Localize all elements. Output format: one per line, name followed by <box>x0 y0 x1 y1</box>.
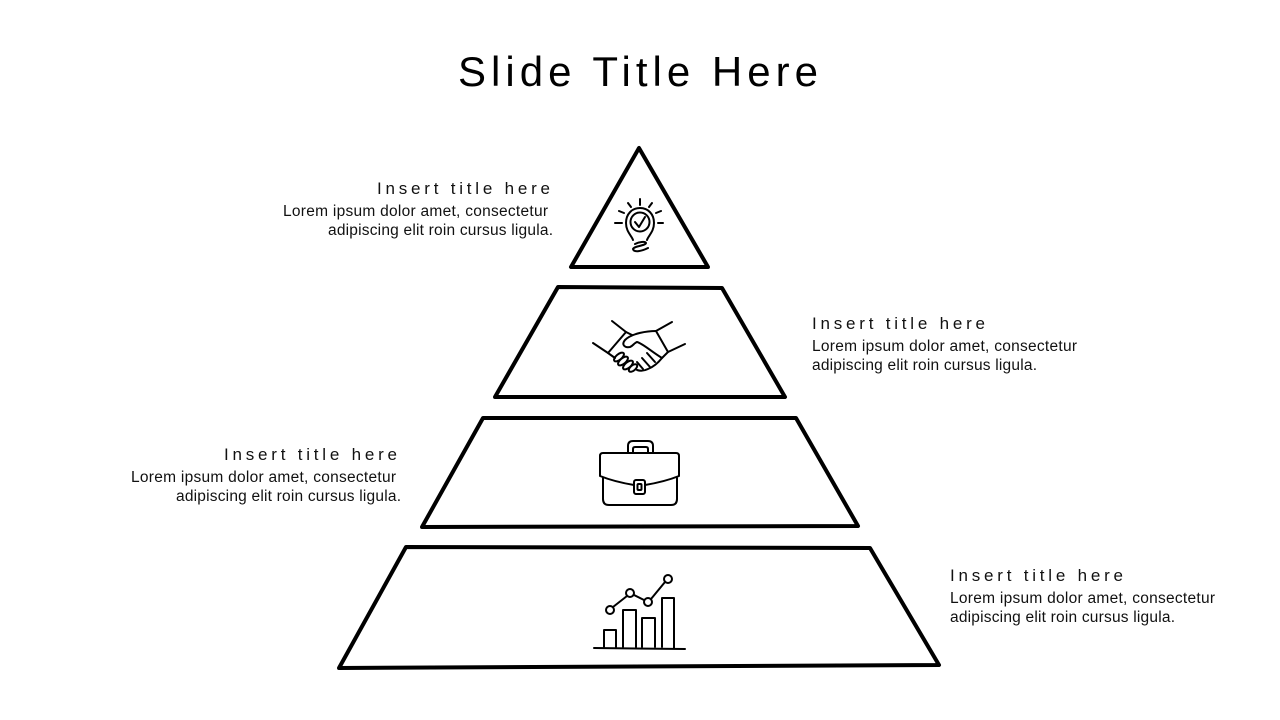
icon: bar chart with trend line <box>594 575 685 649</box>
text block: second right <box>812 314 1077 374</box>
panel: pyramid top tier <box>571 148 708 267</box>
text block: third left: Insert title here <box>224 445 397 464</box>
panel: pyramid bottom tier <box>339 547 939 668</box>
text block: top left <box>283 179 553 239</box>
icon: briefcase <box>600 441 679 505</box>
text block: bottom right <box>950 566 1215 626</box>
text block: second right: Lorem ipsum dolor amet, consectetur <box>812 338 1077 355</box>
text block: bottom right: adipiscing elit roin cursus ligula. <box>950 609 1175 626</box>
text block: second right: adipiscing elit roin cursus ligula. <box>812 357 1037 374</box>
icon: handshake <box>593 321 685 373</box>
title: Slide Title Here <box>458 48 818 95</box>
panel: pyramid second tier <box>495 287 785 397</box>
panel: pyramid third tier <box>422 418 858 527</box>
text block: third left: Lorem ipsum dolor amet, consectetur <box>131 469 396 486</box>
text block: second right: Insert title here <box>812 314 985 333</box>
text block: bottom right: Lorem ipsum dolor amet, consectetur <box>950 590 1215 607</box>
text block: top left: Insert title here <box>377 179 550 198</box>
text block: third left <box>131 445 401 505</box>
text block: top left: Lorem ipsum dolor amet, consectetur <box>283 203 548 220</box>
text block: top left: adipiscing elit roin cursus ligula. <box>328 222 553 239</box>
text block: third left: adipiscing elit roin cursus ligula. <box>176 488 401 505</box>
text block: bottom right: Insert title here <box>950 566 1123 585</box>
icon: light bulb <box>615 199 663 251</box>
